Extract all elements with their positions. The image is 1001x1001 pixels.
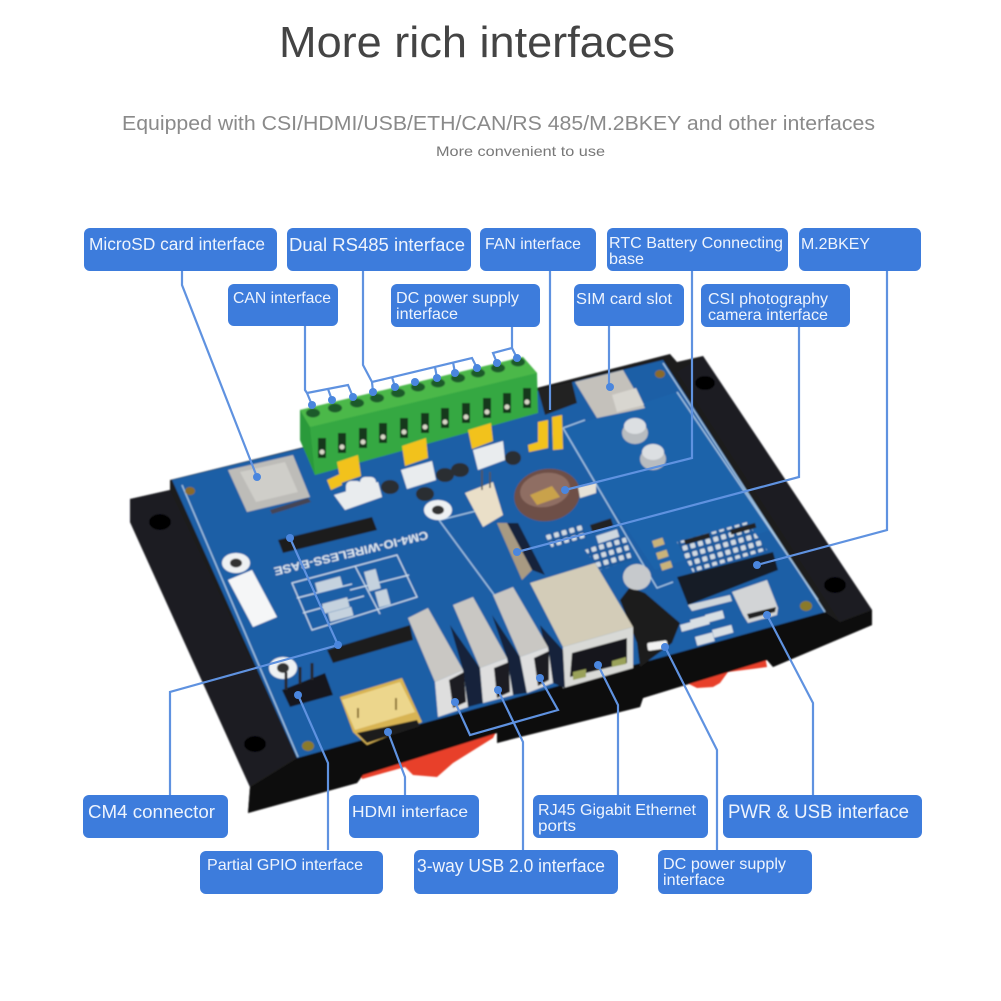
label: RTC Battery Connecting base — [607, 228, 788, 271]
silkscreen pads — [315, 569, 391, 622]
FPC slot beside RJ45 — [497, 523, 545, 580]
label: DC power supply interface (top) — [391, 284, 540, 327]
label: Dual RS485 interface — [287, 228, 471, 271]
screw holes — [306, 358, 525, 418]
label: PWR and USB interface: PWR & USB interface — [728, 802, 909, 823]
label: RTC Battery Connecting base: RTC Battery Connecting — [609, 235, 783, 252]
label: 3-way USB 2.0 interface — [414, 850, 618, 894]
blue PCB — [172, 360, 825, 758]
mounting holes in rail — [149, 376, 846, 752]
microSD slot — [228, 455, 311, 514]
label: RTC Battery Connecting base: base — [609, 251, 644, 268]
label: CSI photography camera interface: camera interface — [708, 307, 828, 324]
M.2 slot — [677, 552, 778, 611]
FPC connector top — [278, 517, 377, 553]
label: DC power supply interface (top): interface — [396, 306, 458, 323]
standoff pillars — [622, 418, 666, 470]
label: MicroSD card interface — [84, 228, 277, 271]
SMD components — [545, 518, 767, 646]
leader lines — [170, 271, 887, 850]
label: CAN interface — [228, 284, 338, 326]
leader dots — [253, 354, 771, 736]
label: PWR and USB interface — [723, 795, 922, 838]
label: DC power supply interface (top): DC power supply — [396, 290, 519, 307]
switch — [538, 382, 577, 415]
label: CM4 connector — [83, 795, 228, 838]
label: DC power supply interface (bottom): DC power supply — [663, 856, 786, 873]
jumpers and headers — [327, 415, 563, 510]
label: FAN interface: FAN interface — [485, 236, 581, 253]
silkscreen table — [292, 555, 417, 630]
label: SIM card slot: SIM card slot — [576, 291, 673, 308]
RTC battery holder — [510, 464, 596, 526]
white label area — [228, 570, 277, 627]
label: MicroSD card interface: MicroSD card interface — [89, 234, 265, 254]
label: FAN interface — [480, 228, 596, 271]
enclosure front wall — [248, 610, 872, 813]
label: CSI photography camera interface: CSI photography — [708, 291, 828, 308]
label: CSI photography camera interface — [701, 284, 850, 327]
green terminal block — [300, 357, 538, 475]
PCB silkscreen lines — [182, 363, 825, 757]
black enclosure — [130, 354, 872, 813]
subtitle: Equipped with CSI/HDMI/USB/ETH/CAN/RS 485/M.2BKEY and other interfaces — [122, 113, 875, 135]
FPC connector bottom — [327, 625, 413, 663]
label: CM4 connector: CM4 connector — [88, 802, 215, 822]
label: SIM card slot — [574, 284, 684, 326]
fan header — [465, 470, 503, 527]
DC jack — [620, 564, 680, 667]
GPIO header — [282, 663, 333, 707]
callout labels — [83, 228, 922, 894]
label: DC power supply interface (bottom): interface — [663, 872, 725, 889]
product photo: carrier board — [130, 354, 872, 813]
title: More rich interfaces — [279, 18, 675, 67]
RJ45 port — [530, 563, 633, 688]
SIM card slot — [575, 370, 645, 418]
red DIN clips — [360, 656, 767, 779]
label: RJ45 Gigabit Ethernet ports — [533, 795, 708, 838]
label: Partial GPIO interface: Partial GPIO interface — [207, 857, 363, 874]
tagline: More convenient to use — [436, 143, 605, 159]
board name: CM4-IO-WIRELESS-BASE — [272, 528, 429, 577]
slot screws — [320, 400, 530, 454]
label: HDMI interface: HDMI interface — [352, 804, 468, 821]
label: Partial GPIO interface — [200, 851, 383, 894]
terminal slots — [318, 388, 531, 458]
label: M.2BKEY: M.2BKEY — [801, 236, 870, 253]
label: RJ45 Gigabit Ethernet ports: RJ45 Gigabit Ethernet — [538, 802, 697, 819]
label: HDMI interface — [349, 795, 479, 838]
label: Dual RS485 interface: Dual RS485 interface — [289, 235, 465, 255]
label: CAN interface: CAN interface — [233, 290, 331, 307]
HDMI port — [340, 678, 422, 745]
USB ports — [408, 587, 565, 717]
label: 3-way USB 2.0 interface: 3-way USB 2.0 interface — [417, 856, 605, 876]
enclosure rail faces — [130, 356, 872, 787]
USB-C port — [732, 580, 778, 623]
label: RJ45 Gigabit Ethernet ports: ports — [538, 818, 576, 835]
label: DC power supply interface (bottom) — [658, 850, 812, 894]
label: M.2BKEY — [799, 228, 921, 271]
mounting holes — [185, 370, 812, 751]
